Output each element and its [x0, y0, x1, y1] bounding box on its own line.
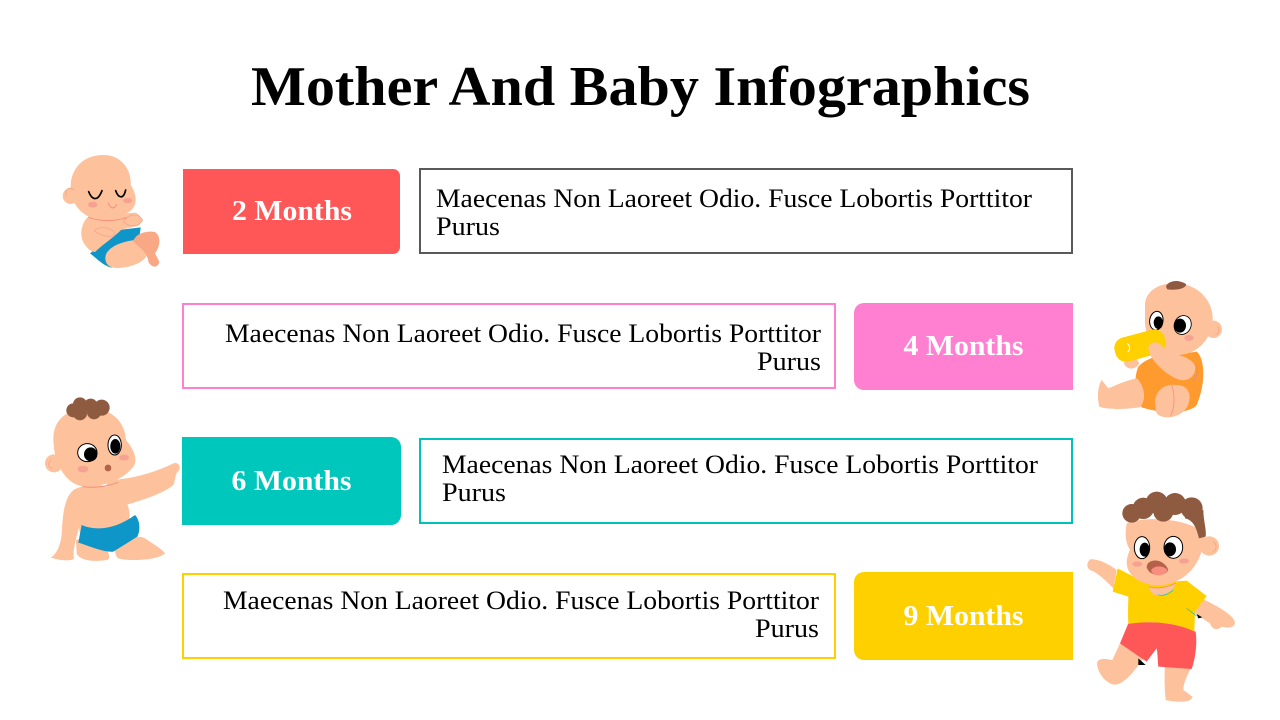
hair [1122, 492, 1206, 538]
hair [66, 397, 110, 420]
label: 2 Months: 2 Months [232, 196, 352, 227]
row 3: 6 months [182, 437, 1072, 525]
text box: row 2 [183, 304, 835, 388]
text box: row 4: Purus [755, 614, 819, 643]
text box: row 2: Purus [757, 347, 821, 376]
icon: sleeping baby [63, 155, 159, 268]
text box: row 1: Purus [436, 212, 500, 241]
text box: row 4 [183, 574, 835, 658]
row 4: 9 months [183, 572, 1073, 660]
label: 9 Months [854, 572, 1073, 660]
icon: walking toddler [1087, 492, 1235, 702]
text box: row 2: Maecenas Non Laoreet Odio. Fusce Lobortis Porttitor [225, 319, 821, 348]
label: 4 Months: 4 Months [904, 331, 1024, 362]
label: 6 Months: 6 Months [232, 466, 352, 497]
text box: row 3: Maecenas Non Laoreet Odio. Fusce Lobortis Porttitor [442, 450, 1038, 479]
label: 6 Months [182, 437, 401, 525]
text box: row 1 [420, 169, 1072, 253]
icon: baby with bottle [1098, 281, 1222, 417]
row 2: 4 months [183, 303, 1073, 390]
row 1: 2 months [183, 169, 1072, 254]
text box: row 1: Maecenas Non Laoreet Odio. Fusce Lobortis Porttitor [436, 184, 1032, 213]
icon: pointing baby [45, 397, 180, 561]
text box: row 3: Purus [442, 478, 506, 507]
label: 9 Months: 9 Months [904, 601, 1024, 632]
text box: row 4: Maecenas Non Laoreet Odio. Fusce Lobortis Porttitor [223, 586, 819, 615]
title: Mother And Baby Infographics [251, 56, 1030, 118]
text box: row 3 [420, 439, 1072, 523]
label: 2 Months [183, 169, 400, 254]
label: 4 Months [854, 303, 1073, 390]
